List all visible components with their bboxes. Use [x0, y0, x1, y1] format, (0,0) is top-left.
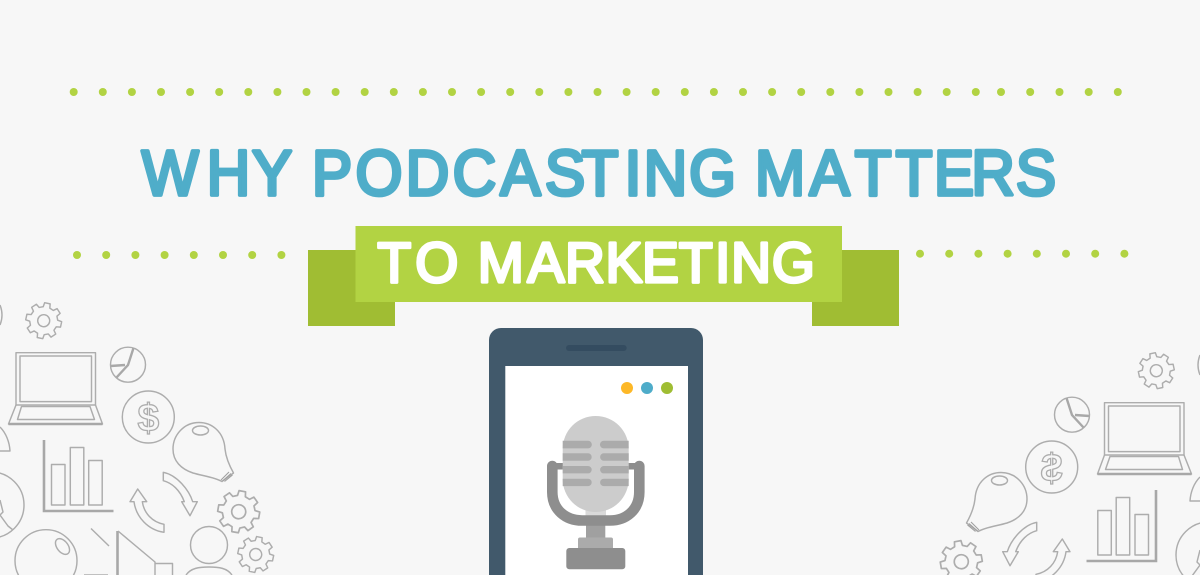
title: MATTERS — [755, 138, 1056, 209]
phone screen — [505, 366, 688, 575]
icon: gear — [1135, 350, 1177, 392]
title: PODCASTING — [312, 138, 736, 209]
icon: cycle arrow up — [1036, 539, 1070, 575]
icon: clipped circle — [1198, 355, 1200, 375]
icon: dollar coin: $ — [1041, 447, 1063, 490]
icon: clipped circle — [0, 305, 2, 325]
icon cluster: right (mirrored) — [937, 350, 1200, 575]
dotted rule: top — [70, 88, 1122, 96]
icon: bar chart — [44, 440, 114, 511]
icon: megaphone — [84, 528, 172, 575]
phone — [489, 328, 703, 575]
icon: cycle arrow down — [163, 472, 197, 516]
icon: globe — [1176, 522, 1200, 575]
title — [142, 138, 1056, 209]
icon: globe — [0, 472, 24, 538]
icon: dollar coin — [1026, 441, 1078, 493]
icon: cycle arrow down — [1003, 522, 1037, 566]
icon: gear — [235, 533, 277, 575]
icon: ball — [15, 530, 77, 575]
icon: microphone — [552, 416, 639, 569]
icon: laptop — [8, 353, 102, 424]
icon: light bulb — [173, 422, 234, 482]
icon: half dial — [0, 427, 10, 451]
icon cluster: left — [0, 300, 277, 575]
banner text: TO — [377, 230, 458, 294]
phone speaker — [566, 345, 627, 351]
dotted rule: lower left — [73, 251, 285, 259]
icon: pie chart — [110, 347, 146, 382]
status dots — [621, 382, 673, 394]
icon: gear — [215, 488, 263, 536]
icon: laptop — [1098, 403, 1192, 474]
icon: half dial — [1190, 477, 1200, 501]
ribbon banner — [308, 226, 899, 326]
icon: light bulb — [966, 472, 1027, 532]
dotted rule: lower right — [916, 250, 1128, 258]
icon: gear — [23, 300, 65, 342]
title: WHY — [142, 138, 292, 209]
icon: person — [186, 526, 232, 575]
icon: bar chart — [1086, 490, 1156, 561]
icon: cycle arrow up — [130, 489, 164, 532]
icon: pie chart — [1054, 397, 1090, 432]
icon: dollar coin — [122, 391, 174, 443]
icon: gear — [937, 538, 985, 575]
banner text: MARKETING — [478, 230, 815, 294]
icon: dollar coin: $ — [137, 397, 159, 440]
